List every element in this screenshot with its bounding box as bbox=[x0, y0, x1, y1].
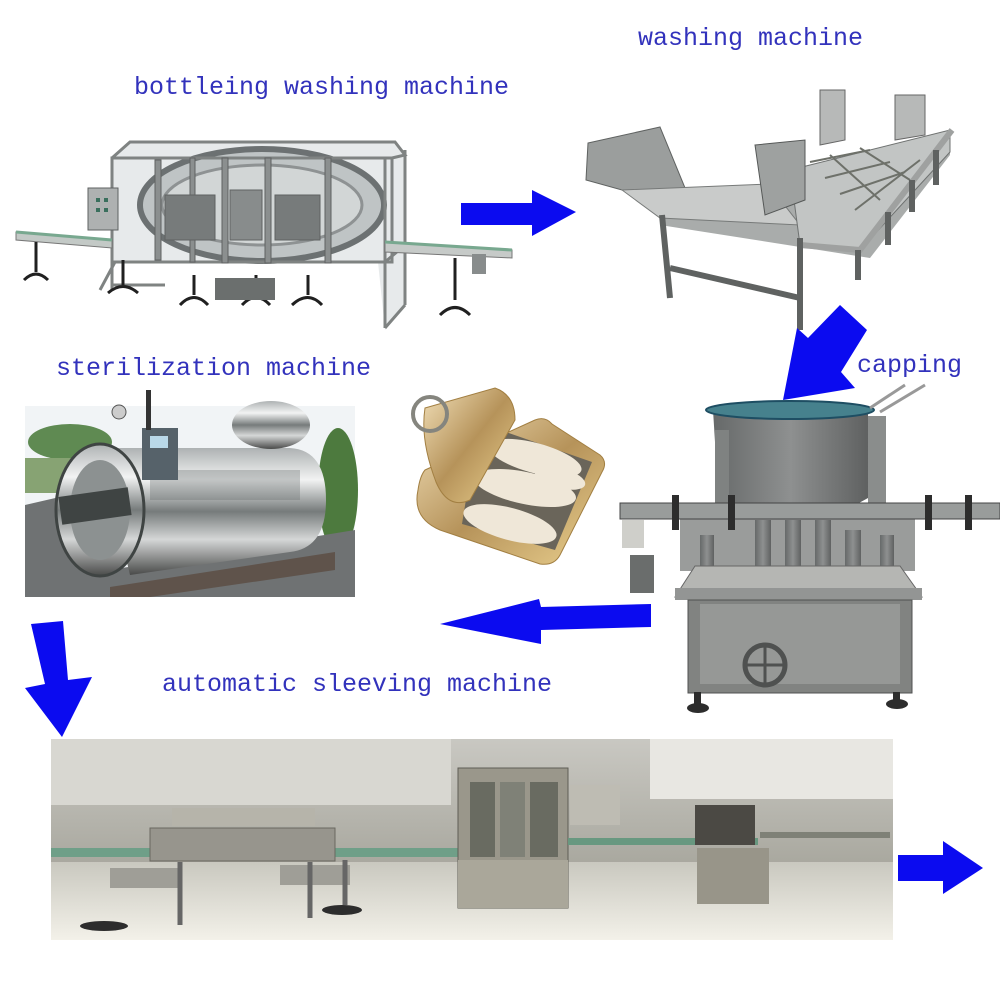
heading: sterilization machine: sterilization machine bbox=[56, 354, 371, 383]
photo: automatic sleeving line bbox=[51, 739, 893, 940]
arrow: left, from capping bbox=[440, 599, 651, 644]
heading: bottleing washing machine: bottleing washing machine bbox=[134, 73, 509, 102]
arrow: right, washing step bbox=[461, 190, 576, 236]
machine: vegetable washing machine bbox=[586, 90, 952, 330]
arrow: down-left to capping bbox=[783, 305, 867, 400]
photo: sterilization machine bbox=[25, 390, 358, 597]
arrow: down to sleeving line bbox=[25, 621, 92, 737]
arrow: right, exit bbox=[898, 841, 983, 894]
machine: capping machine bbox=[620, 385, 1000, 713]
heading: automatic sleeving machine: automatic sleeving machine bbox=[162, 670, 552, 699]
heading: washing machine: washing machine bbox=[638, 24, 863, 53]
photo: open can of sardines bbox=[413, 388, 605, 564]
machine: bottle washing machine bbox=[16, 142, 512, 330]
heading: capping: capping bbox=[857, 351, 962, 380]
